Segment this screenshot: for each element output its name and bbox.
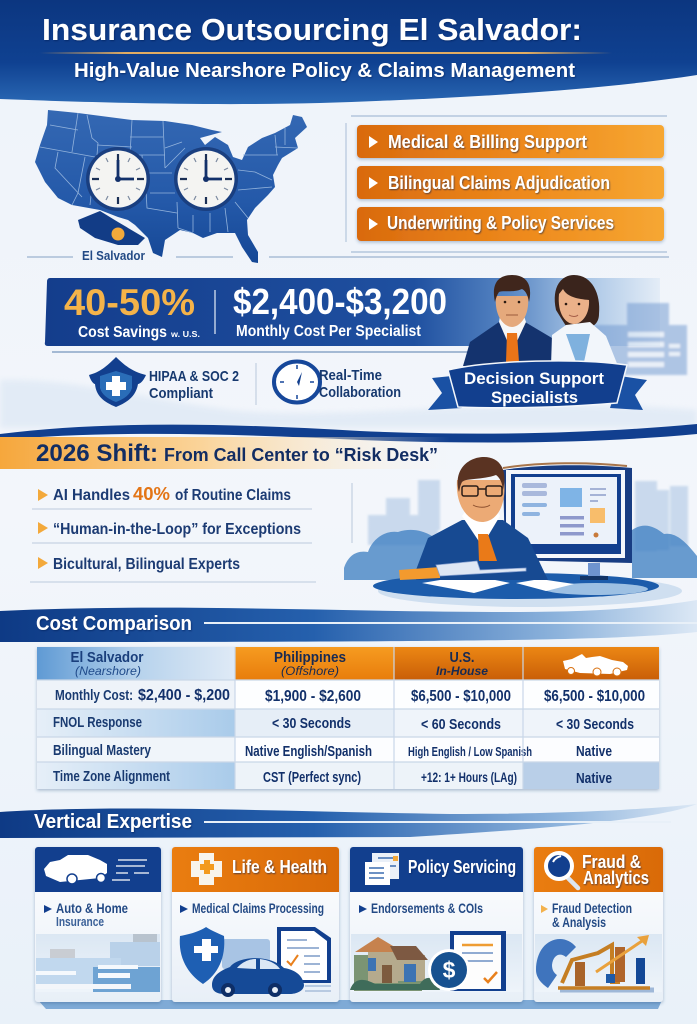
stat: monthly cost: $2,400-$3,200 <box>233 281 447 322</box>
col: El Salvador: El Salvador <box>70 649 144 666</box>
row: time zone alignment: Time Zone Alignment <box>53 769 170 785</box>
map pin <box>112 228 124 240</box>
map: El Salvador <box>78 211 145 245</box>
row: FNOL response: < 30 Seconds <box>272 715 351 732</box>
card: life and health: Life & Health <box>232 857 327 877</box>
service: bilingual claims <box>357 166 664 199</box>
row: time zone alignment <box>37 762 659 789</box>
row: bilingual mastery: High English / Low Spanish <box>408 744 532 759</box>
card: policy servicing: Policy Servicing <box>408 857 516 877</box>
compliance badge: Compliant <box>149 385 213 402</box>
icon: shield <box>89 357 146 407</box>
illustration: buildings <box>36 934 160 992</box>
row: FNOL response: FNOL Response <box>53 715 142 731</box>
ribbon: Specialists <box>491 388 578 407</box>
book stack <box>399 561 526 580</box>
icon: magnifier <box>546 853 578 888</box>
card: auto and home: Insurance <box>56 914 104 929</box>
section header: vertical expertise: Vertical Expertise <box>34 810 192 833</box>
card: policy servicing: Endorsements & COIs <box>371 901 483 916</box>
desk <box>373 573 682 607</box>
stat: monthly cost <box>233 281 447 340</box>
monitor <box>503 463 632 580</box>
man specialist <box>463 275 556 366</box>
specialists illustration <box>428 275 647 410</box>
bullet list <box>30 483 352 582</box>
row: bilingual mastery: Native <box>576 743 612 760</box>
row: bilingual mastery <box>37 737 659 762</box>
col: Philippines <box>274 649 346 678</box>
col: U.S.: In-House <box>436 664 488 678</box>
col: Philippines: Philippines <box>274 649 346 666</box>
bullet: human in the loop: “Human-in-the-Loop” for Exceptions <box>53 521 301 538</box>
col: U.S. <box>436 649 488 678</box>
card base shadow <box>38 1000 662 1009</box>
section header: cost comparison: Cost Comparison <box>36 612 192 635</box>
row: time zone alignment: CST (Perfect sync) <box>263 770 361 786</box>
row: monthly cost <box>37 680 659 709</box>
title: Insurance Outsourcing El Salvador: <box>42 12 582 47</box>
cost comparison table <box>37 647 659 789</box>
background swoosh band <box>0 380 697 428</box>
card: life and health <box>172 847 339 1002</box>
card: fraud and analytics: Fraud Detection <box>552 901 632 916</box>
row: bilingual mastery: Bilingual Mastery <box>53 743 151 759</box>
stat: cost savings <box>64 282 200 341</box>
icon: documents <box>365 853 399 885</box>
card: auto and home: Auto & Home <box>56 901 128 916</box>
icon: car <box>44 855 149 884</box>
stat: monthly cost: Monthly Cost Per Specialist <box>236 323 421 340</box>
ribbon <box>428 361 647 410</box>
section header: 2026 shift: From Call Center to “Risk Desk” <box>164 444 438 465</box>
row: monthly cost: $6,500 - $10,000 <box>544 688 645 705</box>
col: Philippines: (Offshore) <box>281 664 339 678</box>
bullet: AI: AI Handles <box>53 487 130 504</box>
service list <box>346 116 667 252</box>
stat: cost savings: Cost Savings <box>78 324 167 341</box>
card: life and health: Medical Claims Processing <box>192 901 324 916</box>
clock: right <box>174 147 238 211</box>
row: monthly cost: Monthly Cost: <box>55 688 133 704</box>
icon: stopwatch <box>274 362 320 402</box>
service: medical and billing <box>357 125 664 158</box>
stats banner <box>45 278 660 352</box>
header banner <box>0 0 697 104</box>
col: El Salvador <box>70 649 144 678</box>
card: fraud and analytics: & Analysis <box>552 915 606 930</box>
collaboration badge <box>274 362 401 402</box>
illustration: pie and bar chart <box>535 934 662 992</box>
subtitle: High-Value Nearshore Policy & Claims Management <box>74 60 575 82</box>
section header: 2026 shift: 2026 Shift: <box>36 440 158 467</box>
illustration: house, coin and document <box>350 931 522 992</box>
ribbon: Decision Support <box>464 369 604 388</box>
skyline <box>368 480 688 551</box>
illustration: shield, document and car <box>180 927 331 997</box>
icon: medical cross <box>191 853 222 885</box>
row: FNOL response: < 60 Seconds <box>421 716 501 733</box>
compliance badge <box>89 357 239 407</box>
hospital building <box>594 303 687 375</box>
bullet: AI: 40% <box>133 484 170 504</box>
map label: El Salvador <box>82 249 145 263</box>
trees <box>344 526 697 580</box>
stat: cost savings: 40-50% <box>64 282 195 323</box>
row: bilingual mastery: Native English/Spanish <box>245 743 372 760</box>
service: bilingual claims: Bilingual Claims Adjudication <box>388 173 610 193</box>
map with clocks <box>27 110 669 263</box>
bullet: bicultural: Bicultural, Bilingual Experts <box>53 556 240 573</box>
row: FNOL response: < 30 Seconds <box>556 716 634 733</box>
collaboration badge: Collaboration <box>319 384 401 401</box>
collaboration badge: Real-Time <box>319 367 382 384</box>
bullet: AI <box>38 484 291 504</box>
card: fraud and analytics: Fraud & <box>582 852 641 872</box>
icon: cars <box>563 654 628 676</box>
service: medical and billing: Medical & Billing Support <box>388 132 587 152</box>
card: fraud and analytics: Analytics <box>583 868 649 888</box>
row: monthly cost: $6,500 - $10,000 <box>411 688 511 705</box>
risk desk illustration <box>344 457 697 607</box>
man at desk <box>416 457 548 580</box>
section header: cost comparison <box>0 600 697 642</box>
illustration: house, coin and document: $ <box>443 957 456 983</box>
stat: cost savings: w. U.S. <box>170 330 200 339</box>
section header: 2026 shift <box>0 424 697 469</box>
row: FNOL response <box>37 709 659 737</box>
bullet: AI: of Routine Claims <box>175 487 291 504</box>
col: El Salvador: (Nearshore) <box>75 664 141 678</box>
clock: left <box>86 147 150 211</box>
table header row <box>37 647 659 680</box>
row: time zone alignment: +12: 1+ Hours (LAg) <box>421 770 517 785</box>
service: underwriting <box>357 207 664 241</box>
row: monthly cost: $1,900 - $2,600 <box>265 688 361 705</box>
row: monthly cost: $2,400 - $,200 <box>138 687 230 704</box>
service: underwriting: Underwriting & Policy Services <box>387 213 614 233</box>
compliance badge: HIPAA & SOC 2 <box>149 368 239 385</box>
col: U.S.: U.S. <box>450 649 474 666</box>
card: policy servicing <box>350 847 523 1002</box>
woman specialist <box>551 275 618 366</box>
card: auto and home <box>35 847 161 1002</box>
card: fraud and analytics <box>534 847 663 1002</box>
row: time zone alignment: Native <box>576 770 612 787</box>
section header: vertical expertise <box>0 804 697 838</box>
map: United States <box>35 110 307 263</box>
